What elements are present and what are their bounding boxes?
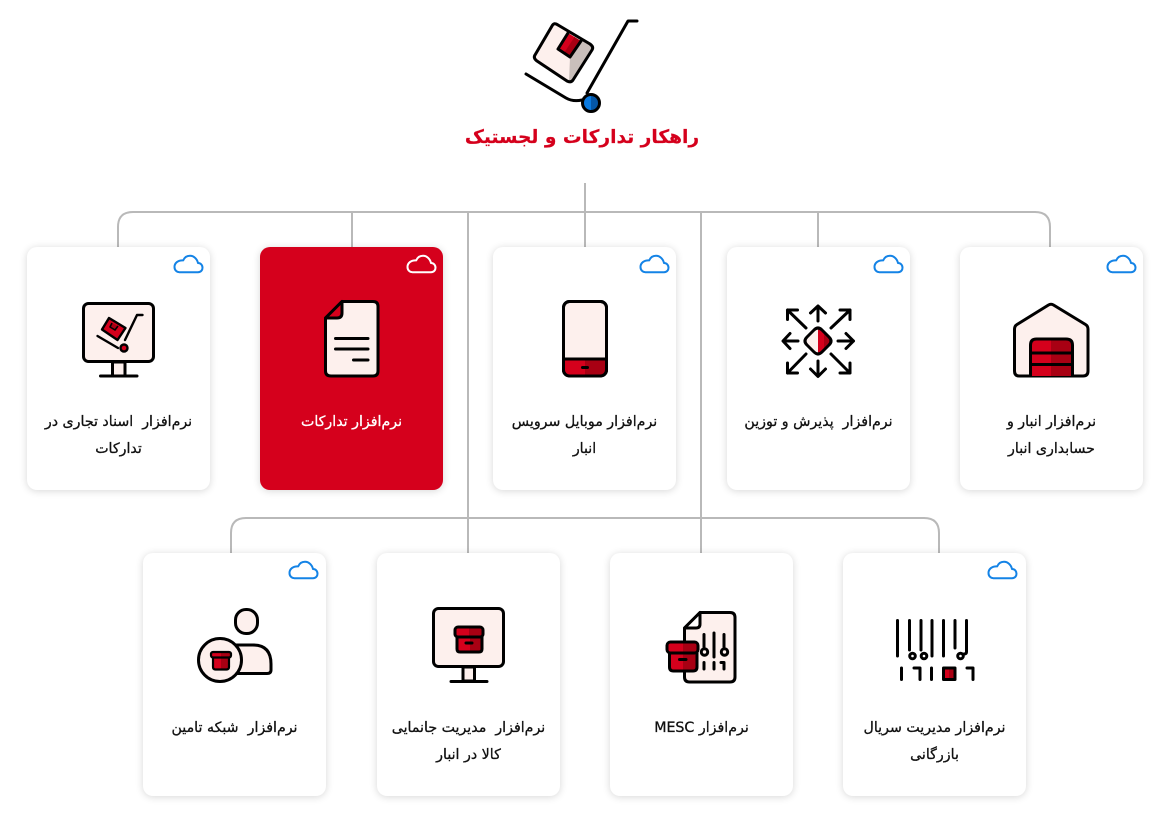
- icon: monitor with box: [432, 607, 505, 683]
- icon: cloud: [640, 254, 670, 274]
- icon: mobile phone: [562, 300, 608, 378]
- label: نرم‌افزار شبکه تامین: [172, 720, 298, 736]
- icon: hand truck with box: [524, 20, 638, 113]
- icon: cloud: [1106, 254, 1136, 274]
- label: نرم‌افزار مدیریت جانمایی کالا در انبار: [392, 720, 545, 763]
- icon: barcode: [896, 619, 974, 681]
- panel: goods placement management software: [377, 553, 560, 796]
- label: نرم‌افزار تدارکات: [301, 414, 402, 430]
- panel: supply chain software: [143, 553, 326, 796]
- icon: document: [324, 300, 380, 378]
- panel: warehouse service mobile software: [493, 247, 676, 490]
- icon: cloud: [406, 254, 436, 274]
- title: راهکار تدارکات و لجستیک: [465, 127, 699, 148]
- icon: cloud: [988, 560, 1018, 580]
- label: نرم‌افزار مدیریت سریال بازرگانی: [864, 720, 1005, 763]
- panel: procurement software (highlighted): [260, 247, 443, 490]
- icon: warehouse: [1013, 302, 1090, 378]
- icon: document with box and sliders: [666, 610, 736, 684]
- icon: cloud: [874, 254, 904, 274]
- panel: MESC software: [610, 553, 793, 796]
- icon: monitor with cart: [82, 302, 155, 378]
- icon: cloud: [288, 560, 318, 580]
- panel: receiving and weighing software: [727, 247, 910, 490]
- label: نرم‌افزار موبایل سرویس انبار: [512, 414, 657, 457]
- label: نرم‌افزار MESC: [654, 720, 749, 736]
- label: نرم‌افزار انبار و حسابداری انبار: [1007, 414, 1096, 457]
- panel: commercial documents software: [27, 247, 210, 490]
- icon: arrows from centre: [781, 304, 856, 378]
- panel: warehouse and accounting software: [960, 247, 1143, 490]
- label: نرم‌افزار پذیرش و توزین: [744, 414, 893, 430]
- icon: cloud: [174, 254, 204, 274]
- label: نرم‌افزار اسناد تجاری در تدارکات: [45, 414, 192, 457]
- panel: commercial serial management software: [843, 553, 1026, 796]
- icon: person with box: [197, 608, 272, 683]
